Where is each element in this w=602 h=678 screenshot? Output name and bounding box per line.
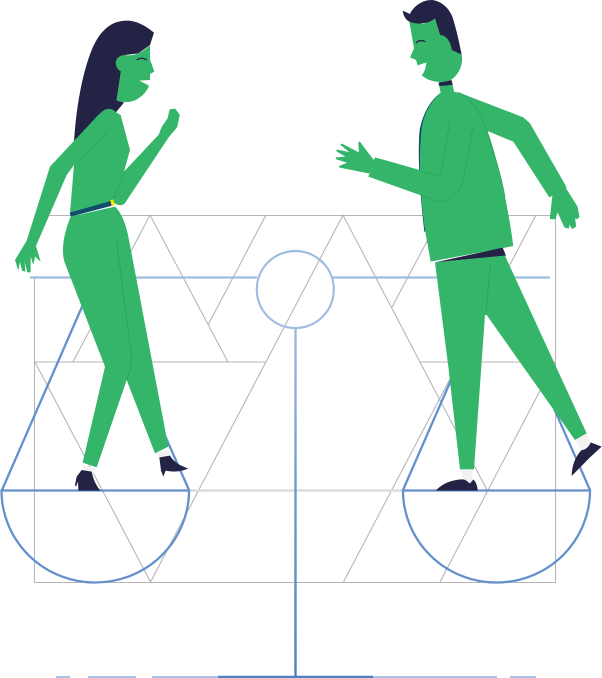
woman: belt bbox=[70, 201, 112, 217]
woman: torso and back arm bbox=[15, 109, 130, 272]
man: near arm bbox=[368, 117, 473, 201]
woman: right shoe bbox=[159, 456, 188, 477]
man: neck collar bbox=[438, 80, 453, 86]
man bbox=[337, 0, 602, 491]
woman: trousers bbox=[63, 207, 168, 467]
woman: belt buckle bbox=[110, 199, 115, 206]
man: front shoe bbox=[436, 479, 478, 491]
man: hair bbox=[403, 0, 462, 55]
man: near hand bbox=[337, 143, 373, 172]
man: smile bbox=[418, 62, 426, 75]
woman: trouser fold bbox=[117, 242, 132, 380]
man: shirt hem shadow bbox=[435, 248, 506, 262]
scale: beam and centre circle bbox=[30, 251, 550, 328]
woman: eye bbox=[137, 58, 147, 60]
woman: hair bbox=[74, 21, 154, 142]
scale: left pan bbox=[2, 277, 189, 582]
man: trouser fold bbox=[486, 263, 491, 315]
man: back strip bbox=[420, 93, 442, 232]
man: torso bbox=[420, 85, 513, 262]
scale: post bbox=[294, 328, 297, 678]
man: face bbox=[409, 18, 462, 82]
man: far hand bbox=[551, 188, 579, 228]
man: trousers bbox=[435, 256, 587, 469]
man: sleeve folds bbox=[422, 93, 505, 201]
woman: sleeve fold bbox=[80, 131, 123, 200]
woman: left shoe bbox=[75, 470, 101, 491]
man: far arm bbox=[457, 92, 567, 197]
man: back shoe bbox=[572, 442, 602, 476]
scale: base line bbox=[56, 676, 536, 678]
scale: right pan bbox=[403, 277, 590, 582]
woman bbox=[15, 21, 188, 491]
man: eye bbox=[416, 41, 425, 43]
woman: socks bbox=[83, 450, 171, 474]
man: socks bbox=[461, 434, 592, 482]
woman: face bbox=[116, 45, 154, 102]
woman: raised arm bbox=[113, 109, 179, 205]
